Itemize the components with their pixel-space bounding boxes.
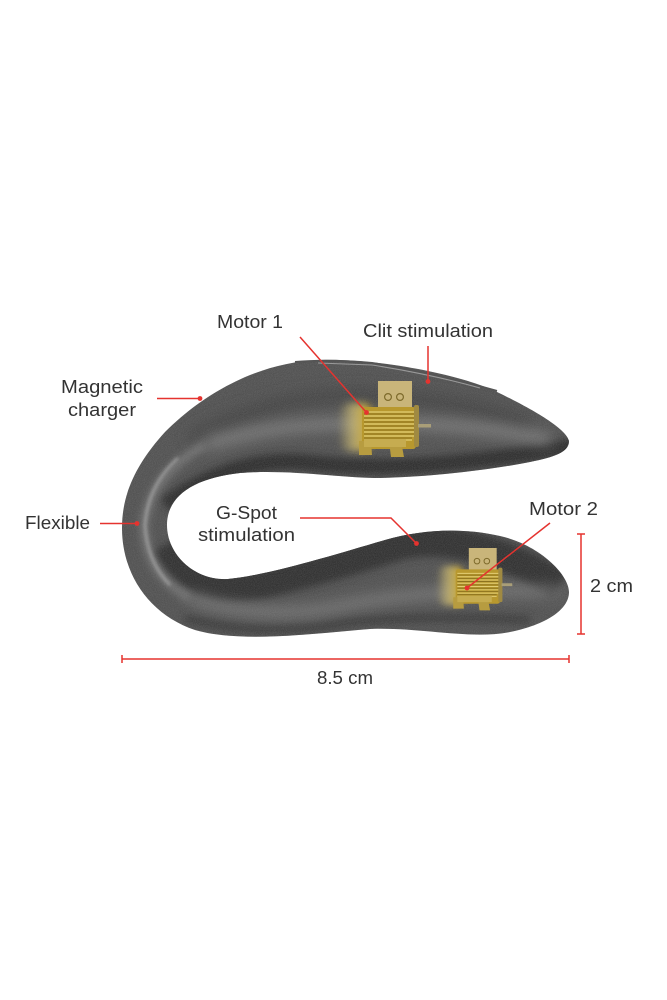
dimension: height 2 cm <box>577 534 585 634</box>
dark inner band, lower arm <box>165 542 560 586</box>
callout: Clit stimulation leader <box>426 346 430 384</box>
dimension: length 8.5 cm <box>122 655 569 663</box>
bend glow <box>144 445 205 598</box>
icon: motor 2 <box>438 548 512 610</box>
label: Flexible: Flexible <box>25 513 90 533</box>
lower highlight <box>190 591 560 612</box>
label: G-Spot stimulation: stimulation <box>198 525 295 545</box>
dark outer band <box>185 618 530 629</box>
label: G-Spot stimulation <box>198 503 295 545</box>
callout: Motor 2 leader <box>465 523 550 590</box>
callout: G-Spot leader <box>300 518 419 546</box>
upper highlight <box>205 423 550 445</box>
bend highlight <box>145 458 178 585</box>
dark inner band, upper arm <box>165 446 575 505</box>
icon: motor 1 <box>340 381 431 457</box>
callout: Motor 1 leader <box>300 337 369 415</box>
callout: Magnetic charger leader <box>157 396 202 401</box>
label: G-Spot stimulation: G-Spot <box>216 503 277 523</box>
product body <box>122 360 569 637</box>
callout: Flexible leader <box>100 521 139 526</box>
label: Clit stimulation: Clit stimulation <box>363 321 493 341</box>
label: Magnetic charger: charger <box>68 400 136 420</box>
top control strip <box>295 361 497 391</box>
label: Motor 2: Motor 2 <box>529 499 598 519</box>
label: Motor 1: Motor 1 <box>217 312 283 332</box>
dark band above highlight <box>190 395 530 440</box>
label: Magnetic charger <box>61 377 143 420</box>
label: Magnetic charger: Magnetic <box>61 377 143 397</box>
surface grain <box>122 362 569 636</box>
label: 8.5 cm: 8.5 cm <box>317 668 373 688</box>
label: 2 cm: 2 cm <box>590 576 633 596</box>
